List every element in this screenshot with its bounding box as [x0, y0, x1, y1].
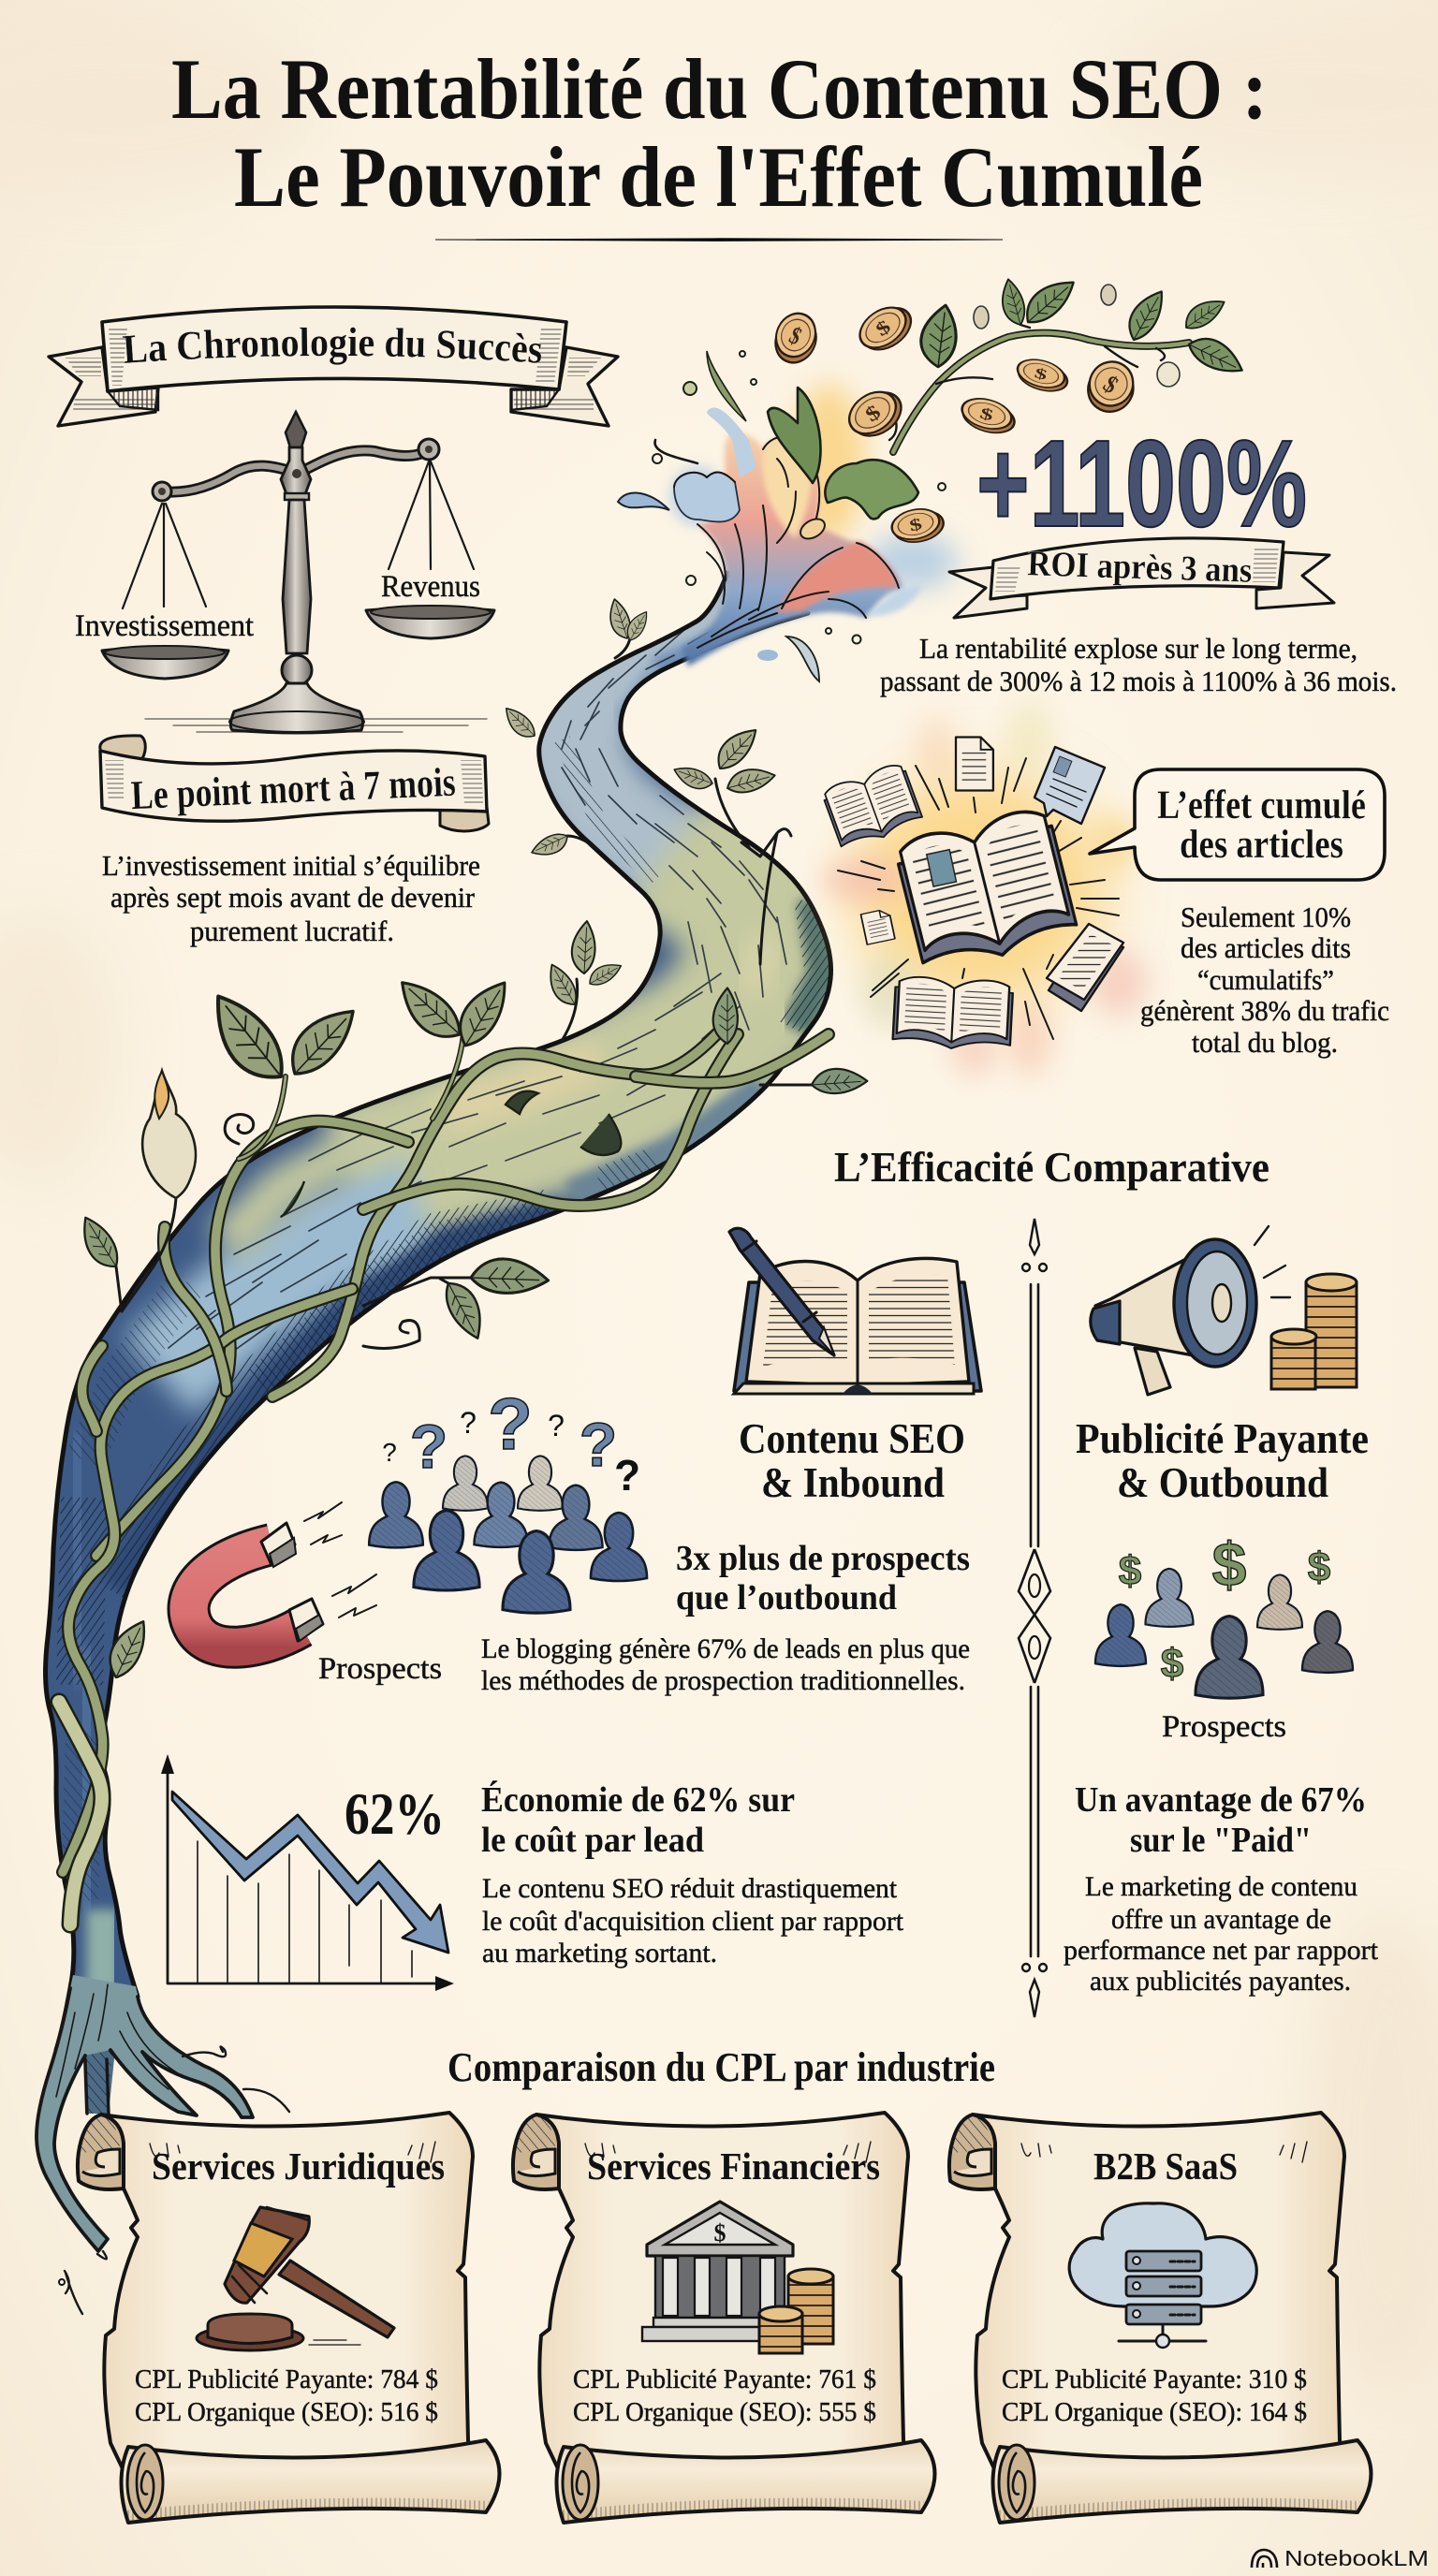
text: point mort description: L’investissement initial s’équilibre [102, 849, 480, 882]
icon: book and pen [729, 1228, 981, 1394]
heading: Publicité Payante & Outbound: Publicité Payante [1076, 1415, 1369, 1462]
heading: L’Efficacité Comparative: L’Efficacité Comparative [834, 1144, 1269, 1191]
icon: magnet [189, 1502, 376, 1647]
text: point mort description: purement lucratif. [190, 915, 394, 947]
icon: megaphone and coins [1091, 1226, 1357, 1395]
trunk body [46, 573, 831, 2059]
icon: crowd with question marks [369, 1383, 647, 1613]
text: point mort description: après sept mois avant de devenir [110, 881, 476, 914]
icon: crowd with question marks: ? [488, 1383, 533, 1465]
illustration: exploding books [821, 702, 1147, 1076]
heading: Contenu SEO & Inbound [739, 1415, 965, 1506]
panel: Services Financiers: Services Financiers [587, 2144, 880, 2188]
label: Revenus: Revenus [381, 570, 480, 604]
text: 3x plus de prospects: que l’outbound [676, 1578, 897, 1617]
text: coût description: Le contenu SEO réduit drastiquement [482, 1873, 898, 1904]
leaves [73, 597, 868, 1682]
heading: Contenu SEO & Inbound: Contenu SEO [739, 1415, 965, 1462]
text: avantage description [1064, 1871, 1379, 1997]
icon: bank with coins [642, 2202, 833, 2353]
title: Le Pouvoir de l'Effet Cumulé [234, 129, 1203, 225]
text: avantage description: aux publicités payantes. [1090, 1966, 1351, 1997]
stat: 62%: 62% [345, 1780, 445, 1847]
stat: +1100%: +1100% [976, 415, 1307, 552]
text: avantage de 67% [1075, 1780, 1367, 1860]
title: La Rentabilité du Contenu SEO : [171, 41, 1268, 137]
panel: Services Juridiques: CPL Publicité Payante: 784 $ [135, 2364, 438, 2394]
icon: paid crowd with dollar signs: $ [1212, 1530, 1246, 1599]
speech bubble: L’effet cumulé [1090, 769, 1385, 880]
logo: NotebookLM: NotebookLM [1284, 2546, 1429, 2570]
heading: Comparaison du CPL par industrie: Comparaison du CPL par industrie [448, 2044, 995, 2090]
panel: Services Financiers: CPL Publicité Payante: 761 $ [573, 2364, 876, 2394]
icon: crowd with question marks: ? [580, 1410, 617, 1479]
heading: Publicité Payante & Outbound: & Outbound [1117, 1459, 1328, 1506]
panel: Services Financiers [513, 2113, 934, 2523]
title [171, 41, 1268, 241]
text: blogging description: les méthodes de prospection traditionnelles. [481, 1665, 965, 1696]
text: économie: le coût par lead [481, 1821, 704, 1860]
roots [37, 1975, 289, 2314]
panel: Services Financiers: CPL Organique (SEO): 555 $ [573, 2397, 876, 2427]
jet [682, 432, 903, 666]
icon: crowd with question marks: ? [548, 1409, 565, 1442]
logo: NotebookLM [1252, 2546, 1429, 2570]
text: ROI description: passant de 300% à 12 mois à 1100% à 36 mois. [880, 665, 1397, 697]
panel: Services Juridiques: Services Juridiques [152, 2144, 445, 2188]
ribbon banner: ROI après 3 ans: ROI après 3 ans [1027, 544, 1253, 591]
icon: balance scale [102, 412, 494, 733]
text: avantage description: Le marketing de contenu [1085, 1871, 1357, 1902]
panel: B2B SaaS [949, 2113, 1371, 2523]
money branch [893, 333, 1189, 452]
text: avantage description: performance net par rapport [1064, 1935, 1379, 1966]
label: Prospects (magnet): Prospects [318, 1652, 442, 1686]
text: effet cumulé description: des articles dits [1181, 931, 1351, 964]
text: blogging description: Le blogging génère 67% de leads en plus que [481, 1633, 970, 1664]
icon: paid crowd with dollar signs [1095, 1530, 1353, 1698]
speech bubble: L’effet cumulé: des articles [1180, 823, 1343, 867]
text: coût description: au marketing sortant. [482, 1938, 717, 1969]
illustration: tree trunk with vines and roots [37, 573, 868, 2314]
text: blogging description [481, 1633, 970, 1696]
text: 3x plus de prospects: 3x plus de prospects [676, 1539, 970, 1578]
chart: falling cost line [161, 1754, 454, 1991]
icon: crowd with question marks: ? [460, 1406, 477, 1440]
heading: Publicité Payante & Outbound [1076, 1415, 1369, 1506]
ribbon banner: Le point mort: Le point mort à 7 mois [130, 759, 457, 818]
icon: crowd with question marks: ? [410, 1412, 448, 1481]
text: effet cumulé description [1140, 900, 1389, 1059]
illustration: rainbow splash and money branch [618, 271, 1249, 681]
text: avantage description: offre un avantage de [1111, 1904, 1331, 1935]
icon: crowd with question marks: ? [614, 1451, 640, 1500]
panel: Services Juridiques [78, 2113, 500, 2523]
icon: gavel [197, 2207, 394, 2350]
ribbon banner: La Chronologie du Succès: La Chronologie du Succès [122, 328, 541, 365]
panel: B2B SaaS: CPL Organique (SEO): 164 $ [1002, 2397, 1307, 2427]
ribbon banner: ROI après 3 ans [949, 538, 1334, 618]
text: coût description: le coût d'acquisition client par rapport [482, 1906, 904, 1937]
icon: crowd with question marks: ? [382, 1438, 397, 1467]
text: avantage de 67%: sur le "Paid" [1130, 1821, 1312, 1860]
ribbon banner: La Chronologie du Succès [47, 305, 620, 428]
text: économie [481, 1780, 795, 1860]
panel: B2B SaaS: B2B SaaS [1093, 2144, 1238, 2188]
text: effet cumulé description: Seulement 10% [1181, 900, 1351, 933]
heading: Contenu SEO & Inbound: & Inbound [761, 1459, 945, 1506]
text: effet cumulé description: total du blog. [1192, 1026, 1338, 1059]
text: effet cumulé description: “cumulatifs” [1197, 963, 1334, 996]
text: ROI description [880, 632, 1397, 697]
text: ROI description: La rentabilité explose sur le long terme, [919, 632, 1357, 665]
icon: paid crowd with dollar signs: $ [1161, 1641, 1183, 1687]
text: 3x plus de prospects [676, 1539, 970, 1617]
label: Investissement: Investissement [75, 609, 254, 643]
panel: Services Juridiques: CPL Organique (SEO): 516 $ [135, 2397, 438, 2427]
panel: B2B SaaS: CPL Publicité Payante: 310 $ [1002, 2364, 1307, 2394]
text: avantage de 67%: Un avantage de 67% [1075, 1780, 1367, 1820]
coins [767, 307, 825, 370]
text: effet cumulé description: génèrent 38% du trafic [1140, 994, 1389, 1027]
icon: paid crowd with dollar signs: $ [1308, 1544, 1330, 1590]
text: point mort description [102, 849, 480, 947]
text: économie: Économie de 62% sur [481, 1780, 795, 1820]
icon: bank with coins: $ [713, 2219, 726, 2247]
vines [59, 638, 829, 1925]
label: Prospects (paid): Prospects [1162, 1710, 1286, 1744]
text: coût description [482, 1873, 904, 1969]
icon: cloud server [1069, 2203, 1256, 2348]
speech bubble: L’effet cumulé: L’effet cumulé [1157, 783, 1366, 827]
ribbon banner: Le point mort [100, 736, 489, 831]
ornamental divider [1019, 1219, 1050, 2017]
icon: paid crowd with dollar signs: $ [1119, 1548, 1141, 1594]
